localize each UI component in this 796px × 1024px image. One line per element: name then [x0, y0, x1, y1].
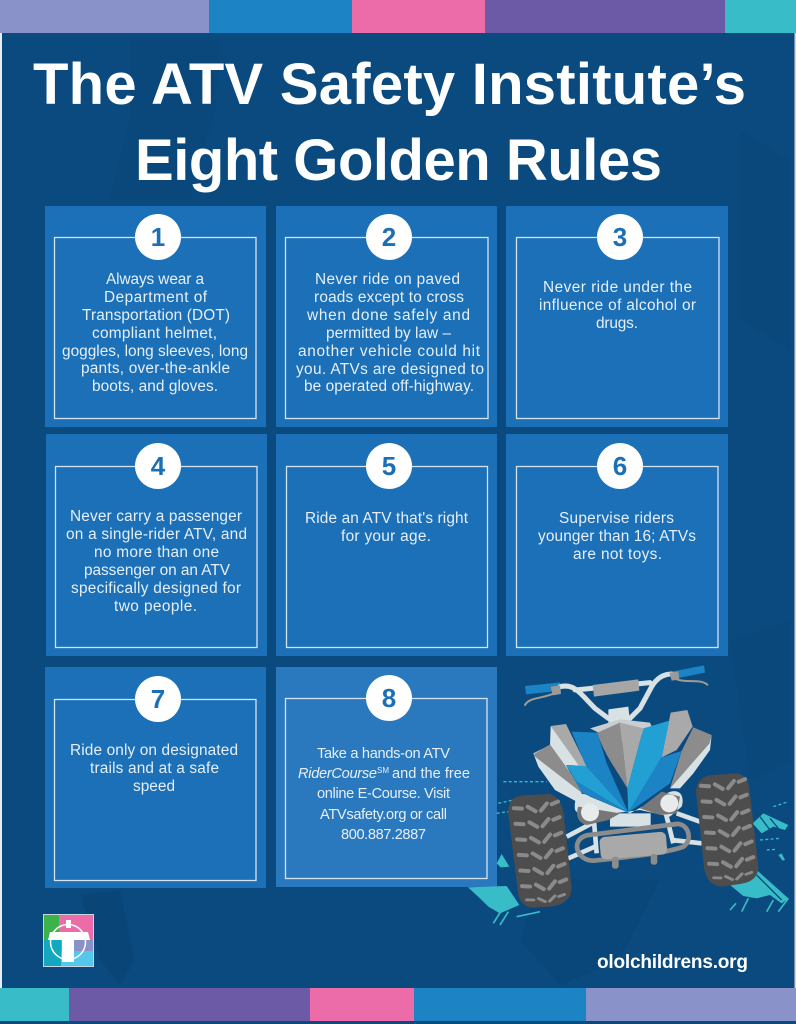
- panel: rule 4: 4: [151, 451, 166, 481]
- panel: rule 1: compliant helmet,: [92, 325, 217, 342]
- right tire: [696, 773, 758, 887]
- panel: rule 7: Ride only on designated: [70, 742, 238, 759]
- panel: rule 3: influence of alcohol or: [539, 297, 696, 314]
- panel: rule 2: another vehicle could hit: [298, 343, 481, 360]
- panel: rule 8: and the free: [392, 766, 470, 782]
- panel: rule 8: Take a hands-on ATV: [317, 746, 450, 762]
- illustration: ATV: [468, 665, 788, 925]
- panel: rule 8: [276, 667, 497, 887]
- panel: rule 8: RiderCourse: [298, 766, 377, 782]
- panel: rule 8: ATVsafety.org or call: [320, 807, 447, 823]
- panel: rule 4: passenger on an ATV: [84, 562, 231, 579]
- panel: rule 7: speed: [133, 778, 175, 795]
- panel: rule 7: 7: [151, 684, 165, 714]
- panel: rule 5: 5: [382, 451, 396, 481]
- panel: rule 5: [276, 434, 497, 656]
- tire track splashes: [468, 782, 788, 925]
- panel: rule 6: 6: [613, 451, 627, 481]
- left tire: [508, 794, 572, 908]
- title: The ATV Safety Institute’s: [33, 52, 746, 117]
- panel: rule 3: Never ride under the: [543, 279, 692, 296]
- panel: rule 5: Ride an ATV that's right: [305, 510, 469, 527]
- panel: rule 4: no more than one: [94, 544, 219, 561]
- panel: rule 8: SM: [377, 766, 389, 775]
- title: Eight Golden Rules: [135, 128, 662, 193]
- panel: rule 3: drugs.: [596, 315, 638, 332]
- panel: rule 2: be operated off-highway.: [304, 378, 474, 395]
- panel: rule 1: goggles, long sleeves, long: [62, 343, 248, 360]
- panel: rule 2: when done safely and: [306, 307, 470, 324]
- top colour bar: [0, 0, 796, 33]
- panel: rule 2: [276, 206, 497, 427]
- panel: rule 1: Department of: [104, 289, 208, 306]
- panel: rule 4: [46, 434, 267, 656]
- panel: rule 1: 1: [151, 222, 165, 252]
- panel: rule 1: [45, 206, 266, 427]
- headlights: [577, 792, 680, 825]
- panel: rule 4: two people.: [114, 598, 197, 615]
- panel: rule 2: you. ATVs are designed to: [296, 361, 484, 378]
- front frame and bumper: [567, 810, 702, 869]
- panel: rule 1: Always wear a: [106, 271, 204, 288]
- panel: rule 8: 800.887.2887: [341, 827, 426, 843]
- panel: rule 3: [506, 206, 728, 427]
- panel: rule 4: specifically designed for: [71, 580, 241, 597]
- panel: rule 2: roads except to cross: [314, 289, 464, 306]
- panel: rule 2: permitted by law –: [326, 325, 451, 342]
- panel: rule 6: are not toys.: [573, 546, 662, 563]
- panel: rule 1: Transportation (DOT): [82, 307, 230, 324]
- panel: rule 1: boots, and gloves.: [92, 378, 218, 395]
- handlebars: [525, 665, 707, 723]
- title: [33, 52, 746, 193]
- website url: ololchildrens.org: [597, 952, 748, 973]
- panel: rule 7: [45, 667, 266, 888]
- panel: rule 2: 2: [382, 222, 396, 252]
- panel: rule 4: Never carry a passenger: [70, 508, 242, 525]
- panel: rule 3: 3: [613, 222, 627, 252]
- panel: rule 5: for your age.: [341, 528, 431, 545]
- panel: rule 8: 8: [382, 683, 396, 713]
- bottom colour bar: [0, 988, 796, 1021]
- panel: rule 6: younger than 16; ATVs: [538, 528, 696, 545]
- panel: rule 1: pants, over-the-ankle: [81, 360, 230, 377]
- panel: rule 6: [506, 434, 728, 656]
- panel: rule 2: Never ride on paved: [315, 271, 460, 288]
- bodywork: [533, 710, 712, 823]
- panel: rule 8: online E-Course. Visit: [317, 786, 450, 802]
- logo: [43, 914, 94, 967]
- panel: rule 4: on a single-rider ATV, and: [66, 526, 247, 543]
- panel: rule 6: Supervise riders: [559, 510, 674, 527]
- panel: rule 7: trails and at a safe: [90, 760, 219, 777]
